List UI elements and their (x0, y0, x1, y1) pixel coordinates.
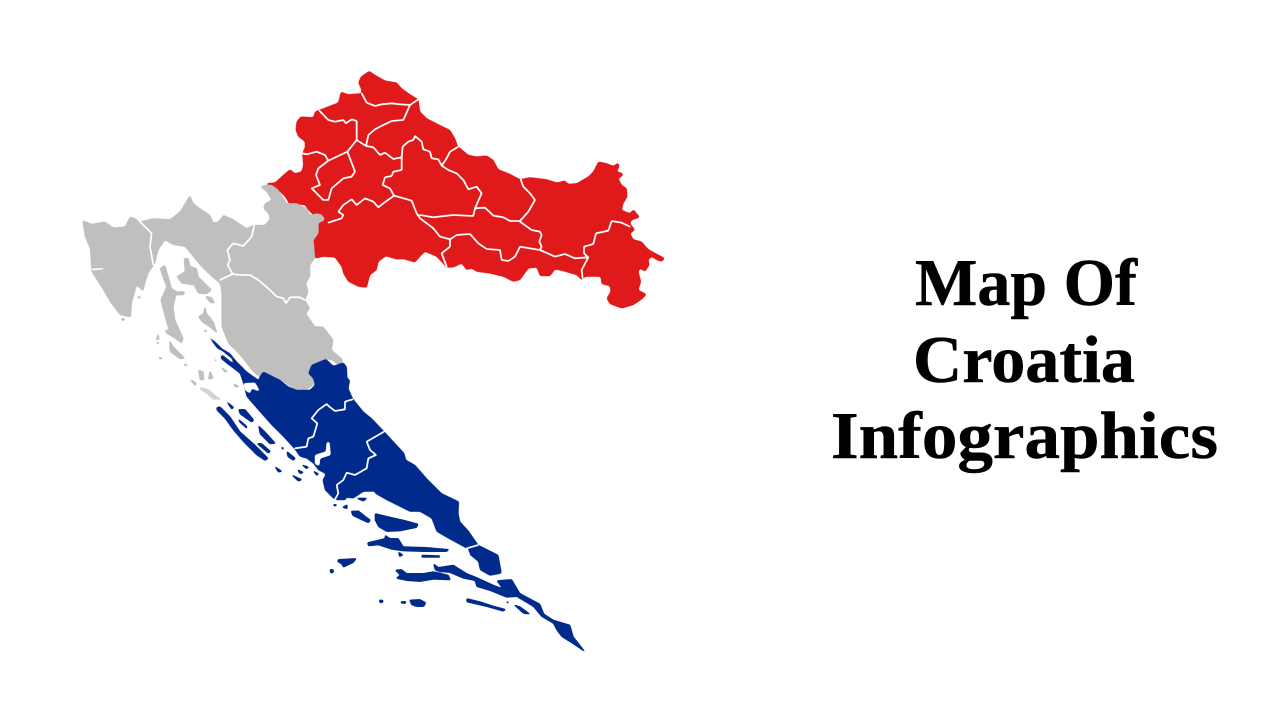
southern islands (217, 401, 371, 523)
region: southern counties (blue) (207, 335, 586, 652)
title line: Infographics: Infographics (831, 399, 1218, 473)
title line: Croatia: Croatia (913, 323, 1135, 397)
title line: Map Of: Map Of (915, 246, 1138, 320)
region: northern counties (red) (265, 71, 665, 308)
title (831, 246, 1218, 473)
northern islands (105, 258, 240, 387)
white inlets (243, 383, 368, 501)
map of Croatia (82, 71, 665, 652)
region: north-western counties (grey) (82, 185, 343, 399)
